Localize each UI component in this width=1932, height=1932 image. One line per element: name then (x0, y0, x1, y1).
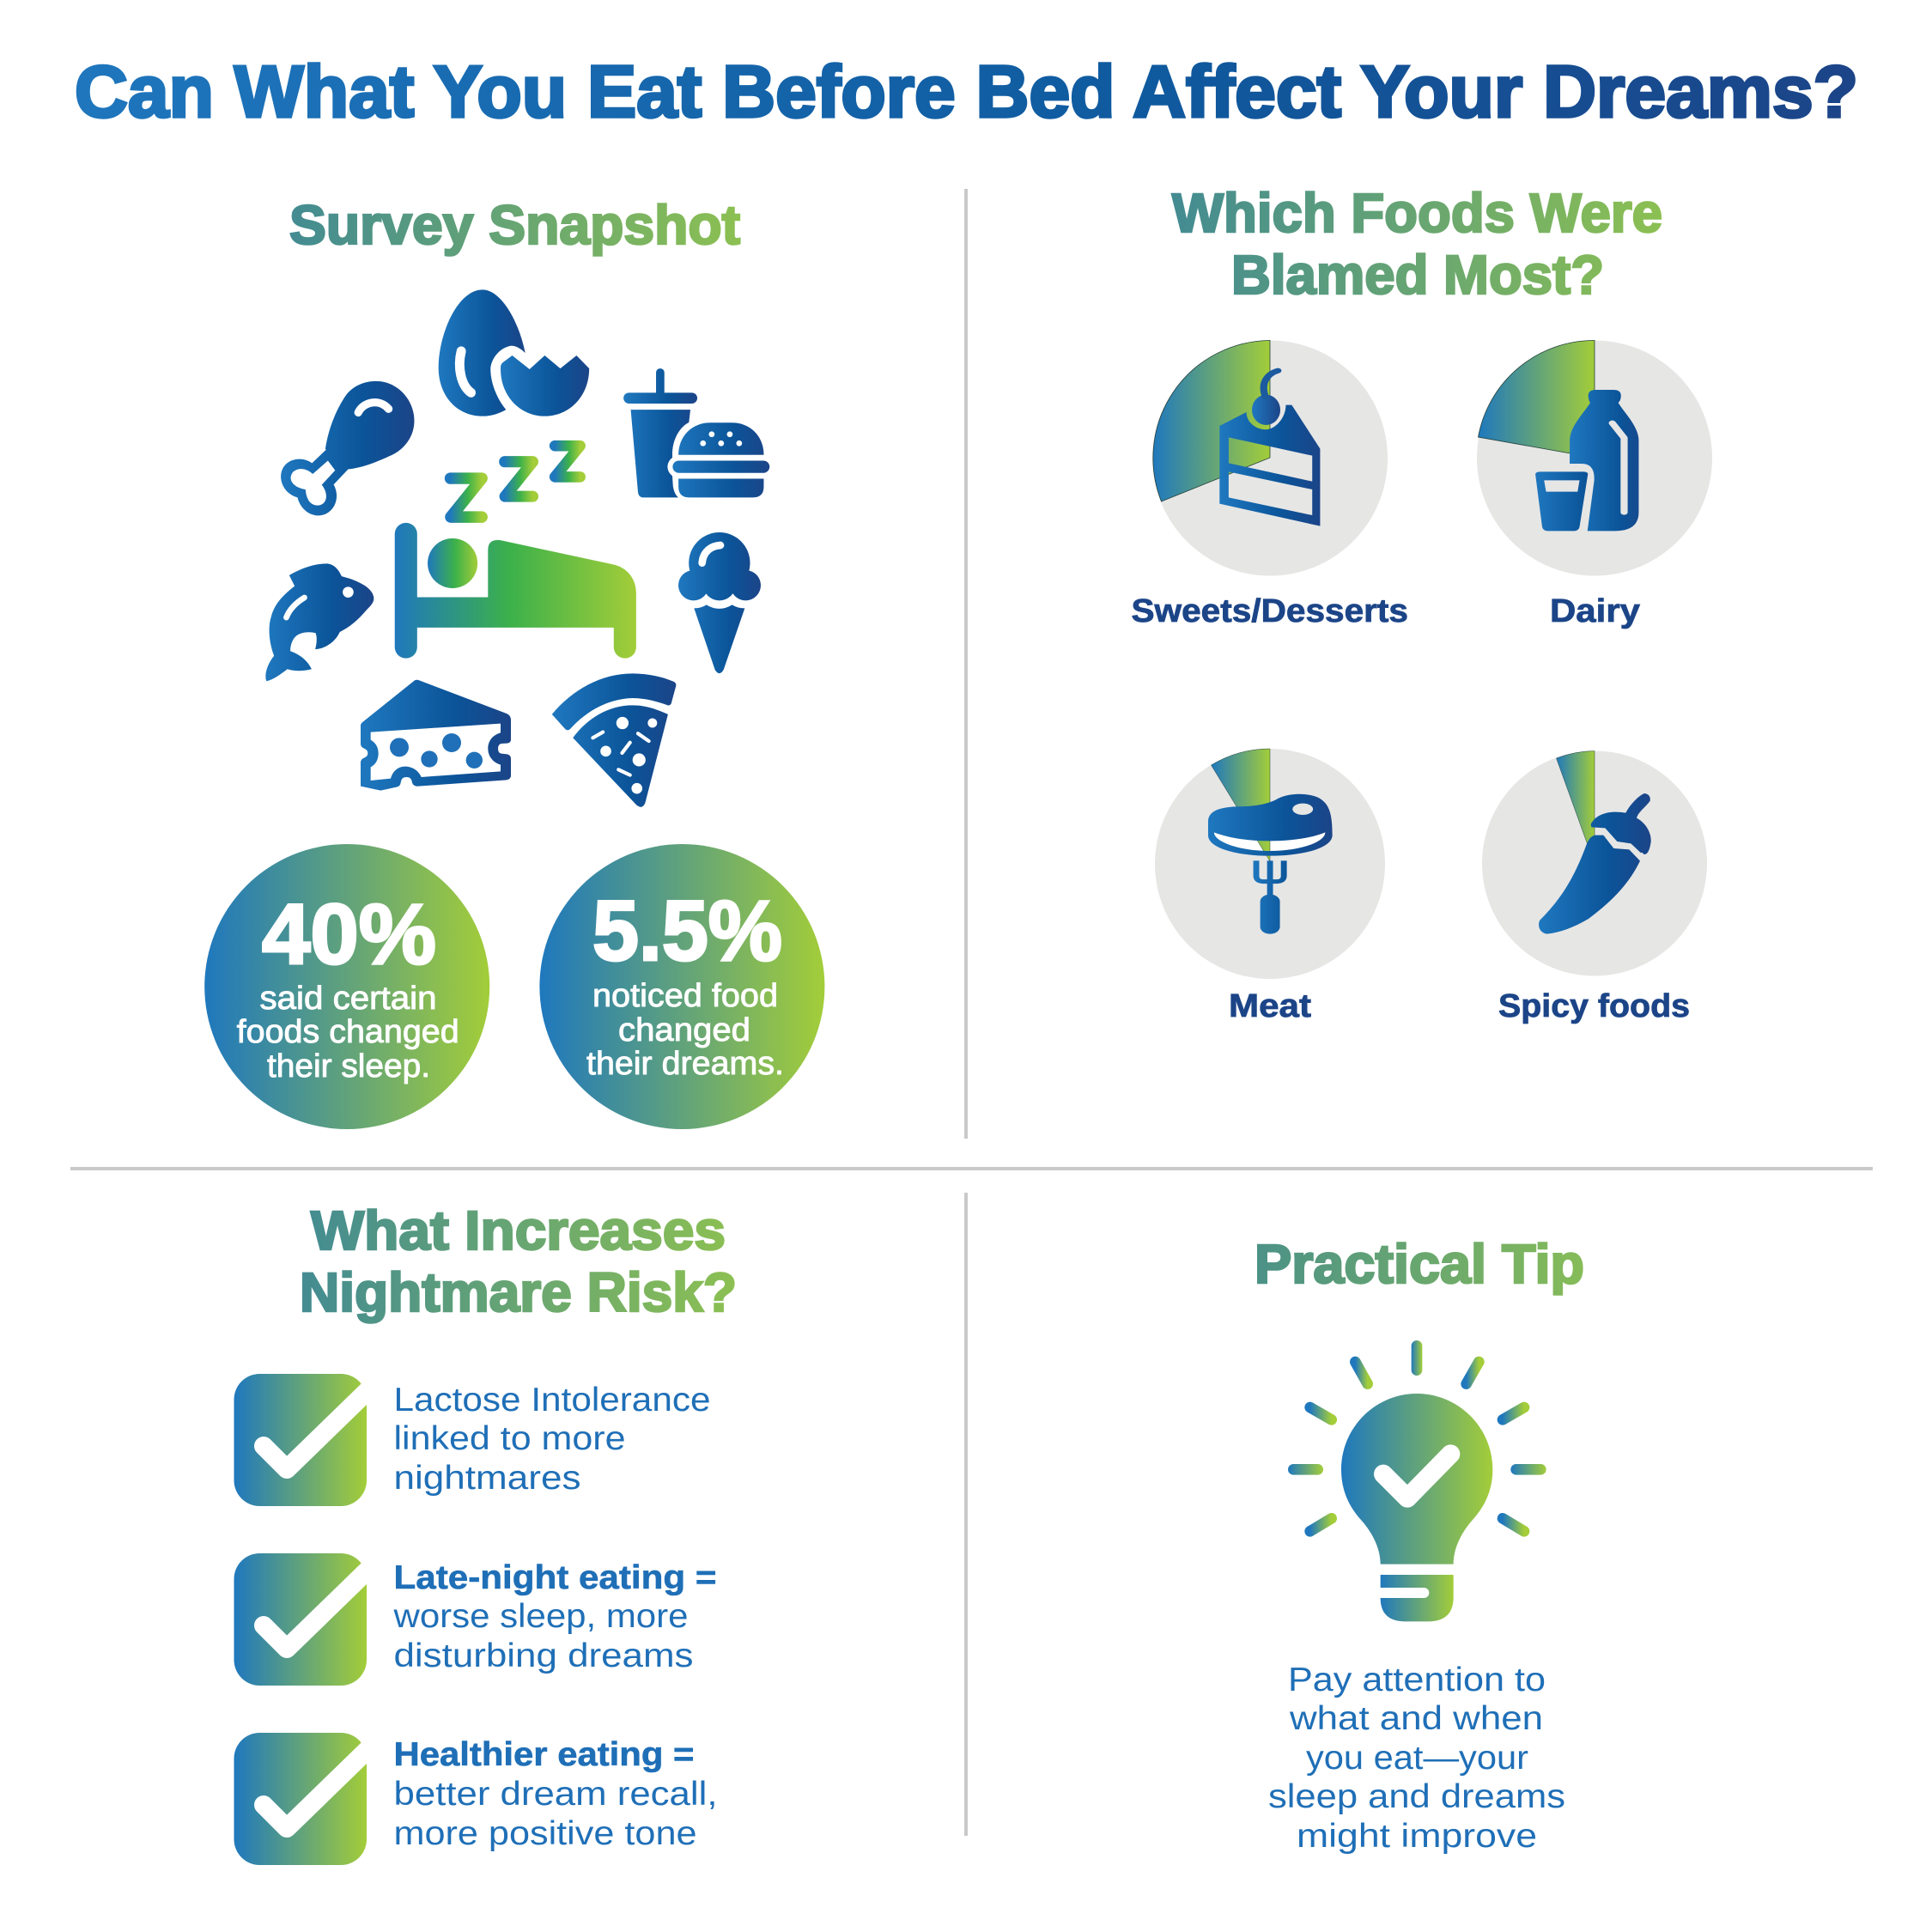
title: Can What You Eat Before Bed Affect Your Dreams? (75, 52, 1858, 133)
icon: check box (234, 1733, 378, 1865)
stat circle: 40 percent: 40% (262, 886, 436, 981)
stat circle: 5.5 percent: 5.5% (592, 883, 782, 978)
icon: chili pepper (1539, 793, 1651, 934)
pie: meat (1155, 749, 1385, 979)
stat circle: 5.5 percent: changed (618, 1012, 750, 1048)
icon: fish (265, 563, 374, 681)
text: practical tip body: Pay attention to (1288, 1662, 1546, 1698)
checklist item: healthier eating (234, 1733, 718, 1865)
heading: nightmare risk (300, 1200, 737, 1323)
icon: pizza slice (552, 673, 676, 807)
illustration: sleeper surrounded by foods (265, 289, 769, 807)
pie: spicy foods (1482, 750, 1707, 975)
checklist item: late-night eating (234, 1553, 716, 1686)
heading: which foods: Which Foods Were (1172, 182, 1662, 244)
label: meat: Meat (1229, 988, 1311, 1024)
label: dairy: Dairy (1550, 593, 1640, 629)
icon: steak on fork (1208, 794, 1333, 934)
text: practical tip body: might improve (1297, 1818, 1537, 1855)
text: healthier eating: better dream recall, (393, 1776, 718, 1813)
icon: zzz (451, 446, 580, 517)
heading: which foods (1172, 182, 1662, 306)
label: spicy foods: Spicy foods (1498, 988, 1690, 1024)
text: practical tip body: you eat—your (1306, 1740, 1528, 1777)
stat circle: 40 percent: their sleep. (267, 1048, 430, 1084)
stat circle: 40 percent: foods changed (237, 1014, 459, 1050)
panel: survey snapshot (204, 194, 824, 1129)
label: sweets and desserts: Sweets/Desserts (1132, 593, 1408, 629)
pie: sweets and desserts (1152, 340, 1388, 575)
icon: check box (234, 1553, 378, 1686)
text: lactose intolerance: Lactose Intolerance (393, 1382, 711, 1419)
text: lactose intolerance: linked to more (393, 1420, 625, 1457)
icon: person in bed (395, 523, 636, 659)
stat circle: 5.5 percent (539, 844, 824, 1129)
vertical divider bottom (964, 1193, 968, 1836)
icon: cake slice (1219, 371, 1320, 526)
icon: egg (439, 289, 589, 416)
text: practical tip body (1268, 1662, 1565, 1855)
text: late-night eating (392, 1559, 716, 1674)
panel: what increases nightmare risk (234, 1200, 737, 1865)
text: late-night eating: worse sleep, more (392, 1598, 689, 1635)
icon: drink and burger (623, 368, 769, 497)
icon: light bulb with check (1288, 1340, 1546, 1621)
text: healthier eating: Healthier eating = (393, 1736, 694, 1773)
text: practical tip body: what and when (1289, 1700, 1543, 1737)
text: practical tip body: sleep and dreams (1268, 1778, 1565, 1815)
stat circle: 5.5 percent: their dreams. (586, 1046, 784, 1082)
text: late-night eating: disturbing dreams (393, 1637, 694, 1674)
text: lactose intolerance: nightmares (393, 1460, 580, 1497)
stat circle: 40 percent: said certain (259, 981, 436, 1017)
icon: chicken drumstick (281, 381, 414, 515)
text: healthier eating (393, 1736, 718, 1852)
horizontal divider (70, 1167, 1873, 1170)
stat circle: 40 percent (204, 844, 489, 1129)
heading: practical tip: Practical Tip (1255, 1233, 1584, 1295)
stat circle: 5.5 percent: noticed food (592, 978, 778, 1014)
checklist item: lactose intolerance (234, 1374, 711, 1506)
heading: which foods: Blamed Most? (1231, 244, 1604, 306)
pie: dairy (1477, 340, 1712, 575)
panel: which foods were blamed most (1132, 182, 1712, 1024)
heading: survey snapshot: Survey Snapshot (289, 194, 740, 256)
text: healthier eating: more positive tone (393, 1815, 697, 1852)
text: late-night eating: Late-night eating = (393, 1559, 716, 1596)
icon: cheese (361, 680, 511, 791)
vertical divider top (964, 189, 968, 1139)
heading: nightmare risk: Nightmare Risk? (300, 1261, 737, 1323)
text: lactose intolerance (393, 1382, 711, 1497)
icon: milk bottle and glass (1535, 390, 1638, 531)
panel: practical tip (1255, 1233, 1584, 1855)
heading: nightmare risk: What Increases (311, 1200, 726, 1261)
icon: ice cream cone (678, 532, 761, 673)
icon: check box (234, 1374, 378, 1506)
